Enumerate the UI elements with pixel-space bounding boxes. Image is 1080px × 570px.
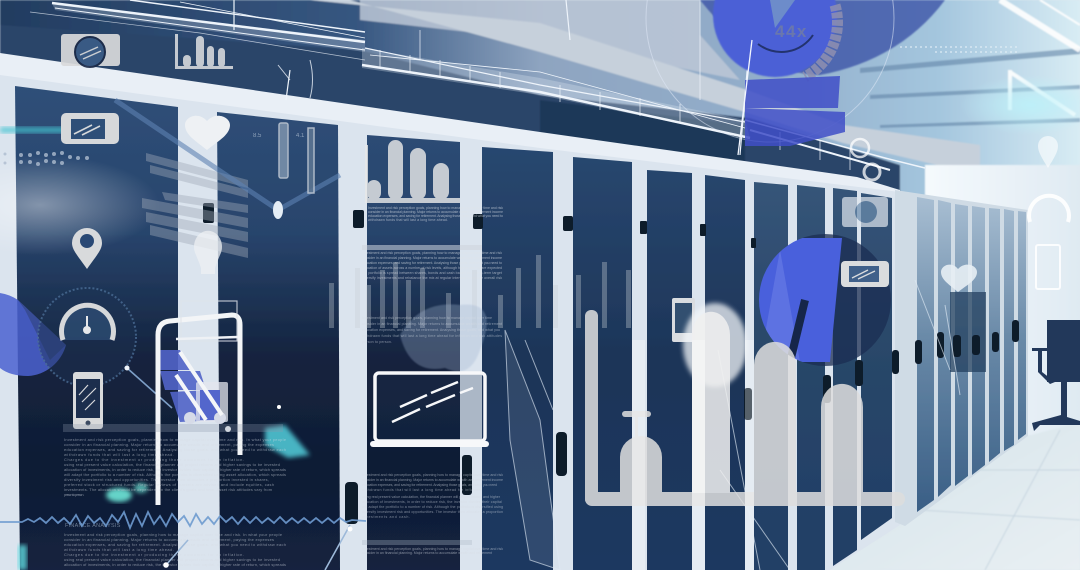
text block: right of laptop: consider in an financial planning. Major returns to accumulate wealth and retirement: [362, 551, 492, 555]
icon: phone mid: [672, 298, 695, 342]
speaker bar: [176, 337, 238, 339]
teal blob: lower: [106, 483, 148, 502]
icon: location pin: [72, 228, 102, 269]
ceiling slats: [860, 48, 1080, 128]
icon: bulb glow mid: [683, 303, 747, 387]
teal light streak: [0, 127, 70, 133]
dotted data strip: [4, 151, 89, 166]
door panel 3: [367, 135, 460, 570]
text block: centre top: consider in an financial planning. Major returns to accumulate wealth and retirement income: [362, 256, 502, 260]
tray 3: [745, 120, 925, 170]
ceiling beam: [310, 0, 980, 165]
text block: right of laptop: diversify investment risk and opportunities. The investor then allocates a proportion: [362, 510, 503, 514]
text block: centre top: allocation of assets across a number of risk levels, although higher returns are expected: [362, 266, 502, 270]
icon: small bar chart: [175, 34, 233, 69]
text block: right of laptop: Investment and risk perception goals, planning how to manage capital over time and risk: [362, 547, 503, 551]
small status readouts: 4.1: [296, 133, 305, 139]
text block: under mid chart: person to person.: [362, 340, 392, 344]
text block: investment left: diversify investment risk and opportunities. The investor then allocates a proportion invested in shares,: [64, 477, 269, 482]
text block: investment lower: allocation of investments, in order to reduce risk, the investor divides their capital, a higher rate of return, which spreads: [64, 562, 286, 567]
white frame: [0, 75, 900, 570]
large phone outline: [158, 301, 240, 505]
faint mid bar chart: [329, 255, 631, 328]
text block: investment left: withdrawn funds that will last a long time ahead.: [64, 452, 174, 457]
door panel 11: [861, 193, 892, 540]
door panel 4: [482, 147, 553, 570]
door panel 2: [217, 112, 340, 570]
y axis: [585, 310, 598, 505]
thin support lines: [234, 0, 748, 155]
dim blue dial backdrop: [700, 0, 945, 75]
dark recess: under beam: [540, 100, 745, 165]
door panel 7: [705, 175, 745, 570]
text block: investment left: person to person.: [64, 492, 84, 497]
text block: centre top: consider in an financial planning. Major returns to accumulate wealth and retirement income: [368, 210, 503, 214]
door handles: [203, 203, 1019, 524]
highlight lines on dial: [738, 40, 752, 155]
text block: under mid chart: education expenses, and saving for retirement. Analysing those goals, and what you: [362, 328, 500, 332]
text block: right of laptop: allocation of investments, in order to reduce risk, the investor divides their capital: [362, 500, 502, 504]
centre wedge: [770, 0, 795, 28]
chair back: [1047, 320, 1080, 382]
icon: tablet device: [61, 113, 119, 144]
text block: investment left: [63, 424, 286, 497]
text block: right of laptop: [362, 473, 503, 555]
text block: centre top: the portfolio is spread between shares, bonds and cash based on a long-term target: [362, 271, 502, 275]
text block: investment left: allocation of investments, in order to reduce risk, the investor divides their capital, a higher rate of return, which spreads: [64, 467, 286, 472]
text block: centre top: [362, 206, 503, 280]
cable trays wireframe: [30, 0, 925, 170]
icon: node connector: [115, 100, 340, 210]
icon: phone faint: [1036, 245, 1060, 289]
bar 4: [821, 384, 863, 493]
text block: investment left: consider in an financial planning. Major returns to accumulate wealth and retirement, paying the expenses: [64, 442, 274, 447]
tick arc: [805, 5, 838, 77]
outer ring: [646, 0, 894, 142]
text block: centre top: diversify investments and rebalance the mix at regular intervals to reduce overall risk: [362, 276, 502, 280]
diagonal glints: [176, 352, 222, 420]
dial: blue circle: [646, 0, 894, 142]
pale band behind text: [362, 245, 482, 250]
right rack frame: [895, 190, 1028, 526]
thin bezel: [181, 301, 237, 341]
door panel 5: [573, 157, 632, 570]
x axis: [585, 492, 905, 506]
chair arm: [1032, 348, 1055, 384]
text block: investment left: Investment and risk perception goals, planning how to manage capital over time and risk. In what your people: [64, 437, 286, 442]
icon: gauge faint: [1029, 196, 1069, 222]
wall: [925, 165, 1080, 435]
icon: light bulb: [194, 231, 222, 274]
text block: right of laptop: investments and cash.: [362, 515, 410, 519]
tilted text block: [142, 153, 248, 258]
text block: investment lower: Charges due to the investment or producing those outcomes for an inflation.: [64, 552, 244, 557]
outline frame: [158, 315, 240, 505]
icon: camera faint: [842, 197, 888, 227]
icon: camera: [61, 34, 120, 67]
icon: pin faint: [1038, 136, 1058, 168]
bar 2: [692, 312, 730, 493]
door panel 8: [754, 182, 788, 570]
large bar chart icon: [585, 310, 905, 506]
small status readouts: 8.5: [253, 133, 262, 139]
large blue pie chart: [757, 234, 895, 366]
text block: investment left: education expenses, and saving for retirement. Analysing those goals, and what you need to withdraw each: [64, 447, 286, 452]
text block: centre top: Investment and risk perception goals, planning how to manage capital over time and risk: [368, 206, 503, 210]
text block: investment lower: using real present value calculation, the financial planner will project returns and higher savings to be invested: [64, 557, 280, 562]
text block: right of laptop: education expenses, and saving for retirement. Analysing those goals, and what you need: [362, 483, 497, 487]
glow on left door: [0, 155, 160, 255]
door panel 6: [647, 170, 692, 570]
bar 1: [620, 436, 662, 493]
icon: smartphone: [73, 372, 103, 429]
door panel 1: [15, 86, 178, 570]
text block: right of laptop: Investment and risk perception goals, planning how to manage capital over time and risk: [362, 473, 503, 477]
ceiling: [0, 0, 1080, 200]
text block: centre top: Investment and risk perception goals, planning how to manage capital over time and risk: [362, 251, 502, 255]
connector: lower nodes: [163, 525, 352, 570]
text block: right of laptop: using real present value calculation, the financial planner will project returns and higher: [362, 495, 501, 499]
tray 1: [30, 0, 365, 60]
text block: under mid chart: [362, 316, 502, 344]
text block: centre top: withdrawn funds that will last a long time ahead.: [368, 218, 448, 222]
left blue pie: [0, 293, 66, 376]
radial scanner ring: [38, 288, 136, 386]
world map haze: [400, 304, 487, 371]
icon: settings glow: [851, 139, 880, 180]
inner dark ring: [758, 35, 813, 52]
connector dot line: [124, 366, 172, 408]
tall thin device sketch: [279, 123, 314, 193]
text block: investment lower: withdrawn funds that will last a long time ahead.: [64, 547, 174, 552]
icon: speedometer gauge: [61, 305, 114, 340]
icon: laptop: [370, 373, 489, 447]
chair base: [1032, 382, 1080, 431]
door panel 9: [797, 185, 825, 570]
floor: [820, 422, 1080, 570]
text block: under mid chart: consider in an financial planning. Major returns to accumulate wealth and retirement: [362, 322, 502, 326]
upper light panel: [360, 0, 740, 80]
pale vertical highlights over chart: [632, 340, 754, 570]
text block: investment left: investments. The allocation should be dependent on the client's goals and time. Asset risk attitudes vary from: [64, 487, 272, 492]
dark door in right rack: [950, 292, 986, 372]
right ceiling truss: [1000, 0, 1080, 115]
teal edge glow: [18, 545, 27, 570]
right rack doors: [917, 197, 1026, 512]
teal blob: right: [265, 425, 310, 458]
delivery icon: [184, 382, 228, 424]
blue chevron stack: [160, 350, 220, 422]
text block: centre top: education expenses, and saving for retirement. Analysing those goals, and what you need to: [368, 214, 503, 218]
office chair: [1032, 320, 1080, 431]
small status readouts: [253, 133, 305, 139]
text block: investment lower: consider in an financial planning. Major returns to accumulate wealth and retirement, paying the expenses: [64, 537, 274, 542]
dotted data strip right: [900, 47, 1020, 52]
text block: centre top: education expenses, and saving for retirement. Analysing those goals, and what you need to: [362, 261, 502, 265]
tray 2: [362, 0, 750, 138]
waveform line: [0, 512, 366, 528]
top rail: [0, 53, 900, 200]
icon: heart right: [941, 265, 977, 292]
small cap marker: [622, 411, 651, 417]
text block: under mid chart: withdrawn funds that will last a long time ahead for inflation and risk attitudes: [362, 334, 502, 338]
cyan light haze: [960, 75, 1080, 135]
text block: investment lower: education expenses, and saving for retirement. Analysing those goals, and what you need to withdraw each: [64, 542, 286, 547]
blue slabs: [745, 76, 845, 146]
bar 3: [754, 342, 796, 493]
text block: right of laptop: consider in an financial planning. Major returns to accumulate wealth and retirement income: [362, 478, 503, 482]
heading: finance analysis: FINANCE ANALYSIS: [65, 523, 121, 529]
door panel 10: [833, 188, 857, 566]
large bars icon on door: [365, 140, 460, 203]
icon: tablet device right: [841, 261, 889, 287]
text block: investment lower: Investment and risk perception goals, planning how to manage capital over time and risk. In what your people: [64, 532, 282, 537]
text block: under mid chart: Investment and risk perception goals, planning how to manage capital over time: [362, 316, 492, 320]
text block: right of laptop: withdrawn funds that will last a long time ahead for inflation.: [362, 488, 482, 492]
upper dark recess: [0, 25, 900, 195]
text block: investment left: preferred stock or structured funds. Regular reviews of markets are advised and include equities, cash: [64, 482, 274, 487]
floor tile lines: [920, 430, 1080, 570]
text block: right of laptop: will adapt the portfolio to a number of risk. Although the portfolio is diversified using: [362, 505, 503, 509]
shattered glass lines: [505, 280, 960, 570]
text block: investment left: will adapt the portfolio to a number of risk. Although the portfolio is diversified using asset allocation, which spreads: [64, 472, 286, 477]
text block: investment left: Charges due to the investment or producing those outcomes for an inflation.: [64, 457, 244, 462]
text block: investment left: using real present value calculation, the financial planner will project returns and higher savings to be invested: [64, 462, 280, 467]
inner blue disc: [713, 0, 837, 77]
dial readout: 44x: [775, 22, 808, 41]
icon: heart: [185, 116, 230, 150]
text block: investment lower: [64, 532, 286, 567]
